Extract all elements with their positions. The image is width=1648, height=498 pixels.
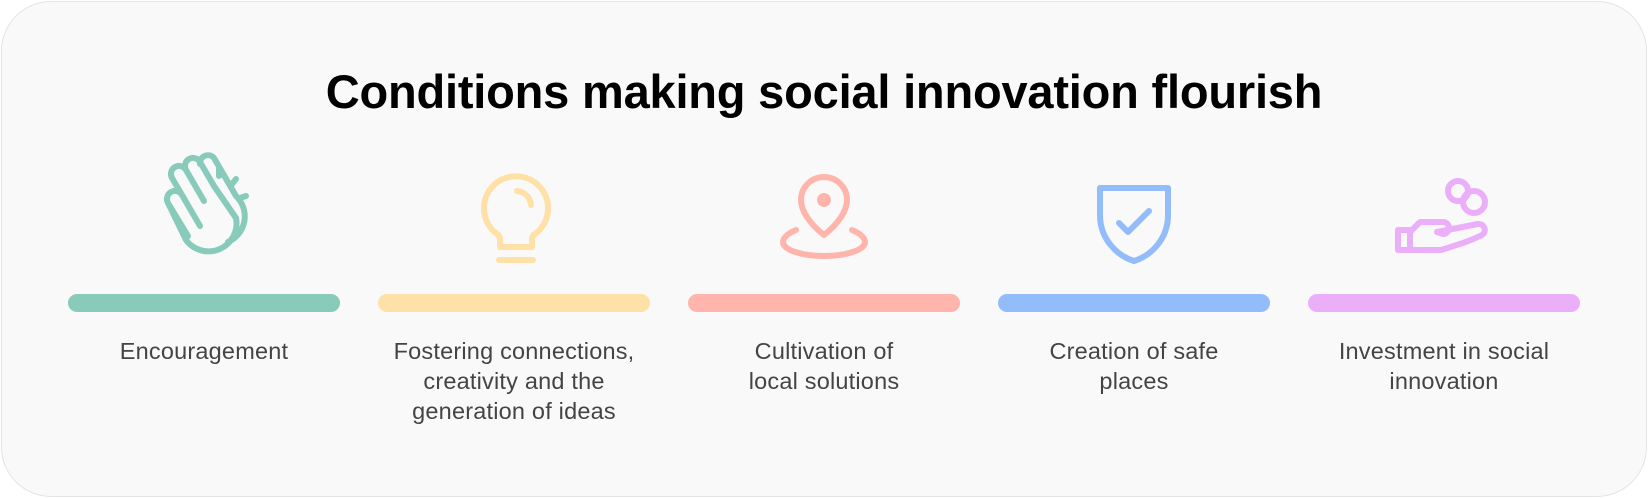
icon: light bulb: [484, 176, 548, 260]
icon: hand with coins: [1398, 181, 1485, 250]
icon: clapping hands: [167, 155, 246, 251]
label: safe places: Creation of safe: [1049, 338, 1219, 364]
title: Conditions making social innovation flourish: [326, 65, 1322, 118]
bar: safe places: [998, 294, 1270, 312]
label: fostering: Fostering connections,: [394, 338, 634, 364]
label: investment: innovation: [1389, 368, 1499, 394]
icon: location pin: [783, 177, 865, 256]
label: cultivation: Cultivation of: [755, 338, 893, 364]
icon: shield with check: [1100, 188, 1168, 261]
label: cultivation: local solutions: [749, 368, 899, 394]
label: encouragement: Encouragement: [120, 338, 288, 364]
bar: fostering: [378, 294, 650, 312]
label: safe places: places: [1099, 368, 1169, 394]
label: investment: [1339, 338, 1549, 394]
bar: investment: [1308, 294, 1580, 312]
label: fostering: creativity and the: [423, 368, 605, 394]
label: fostering: generation of ideas: [412, 398, 616, 424]
label: fostering: [394, 338, 634, 424]
label: cultivation: [749, 338, 899, 394]
label: investment: Investment in social: [1339, 338, 1549, 364]
bar: encouragement: [68, 294, 340, 312]
label: safe places: [1049, 338, 1219, 394]
bar: cultivation: [688, 294, 960, 312]
